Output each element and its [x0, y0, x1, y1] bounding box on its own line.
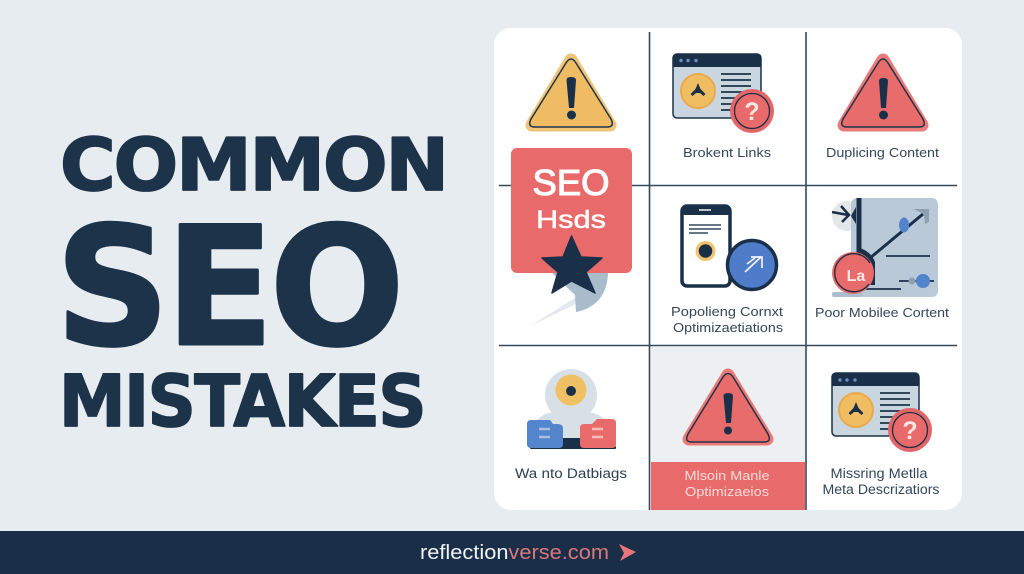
icon: browser with question mark: [673, 54, 774, 133]
title: MISTAKES: [59, 361, 425, 443]
title: COMMON: [60, 124, 447, 208]
label: missing meta optimizations: Optimizaeios: [685, 484, 770, 499]
icon: phone with arrow badge: [682, 206, 776, 290]
icon: chart with badge: [832, 198, 938, 297]
footer url: reflection verse.com: [420, 541, 609, 564]
label: duplicating content: Duplicing Content: [826, 145, 939, 160]
label: missing meta descriptions: Meta Descrizatiors: [822, 482, 940, 497]
icon: SEO badge with star: SEO: [532, 162, 610, 203]
icon: folders and target: [527, 369, 616, 449]
icon: SEO badge with star: Hsds: [536, 206, 606, 234]
label: missing meta optimizations: [684, 468, 770, 499]
label: broken links: Brokent Links: [683, 145, 772, 160]
icon: red warning triangle highlighted: [687, 374, 769, 442]
label: want to databags: Wa nto Datbiags: [515, 466, 627, 481]
footer bar: [0, 531, 1024, 574]
icon: browser with question mark: ?: [744, 98, 760, 126]
label: popoliong content optimization: Optimizaetiations: [673, 320, 784, 335]
icon: browser with question mark 2: ?: [902, 417, 918, 445]
label: missing meta descriptions: Missring Metlla: [830, 466, 928, 481]
icon: yellow warning triangle: [530, 59, 612, 127]
panel: mistakes grid: [494, 28, 962, 510]
icon: chart with badge: La: [847, 268, 865, 285]
label: popoliong content optimization: [671, 304, 784, 335]
label: missing meta optimizations: Mlsoin Manle: [684, 468, 770, 483]
icon: red warning triangle: [842, 59, 924, 127]
icon: SEO badge with star: [511, 148, 632, 326]
label: popoliong content optimization: Popolieng Cornxt: [671, 304, 783, 319]
icon: browser with question mark 2: [832, 373, 932, 452]
icon: footer arrow: [619, 544, 636, 561]
panel: highlighted cell: [651, 347, 805, 510]
title: SEO: [56, 192, 401, 384]
label: missing meta descriptions: [822, 466, 940, 497]
title: [56, 124, 447, 443]
label: poor mobile content: Poor Mobilee Cortent: [815, 305, 949, 320]
